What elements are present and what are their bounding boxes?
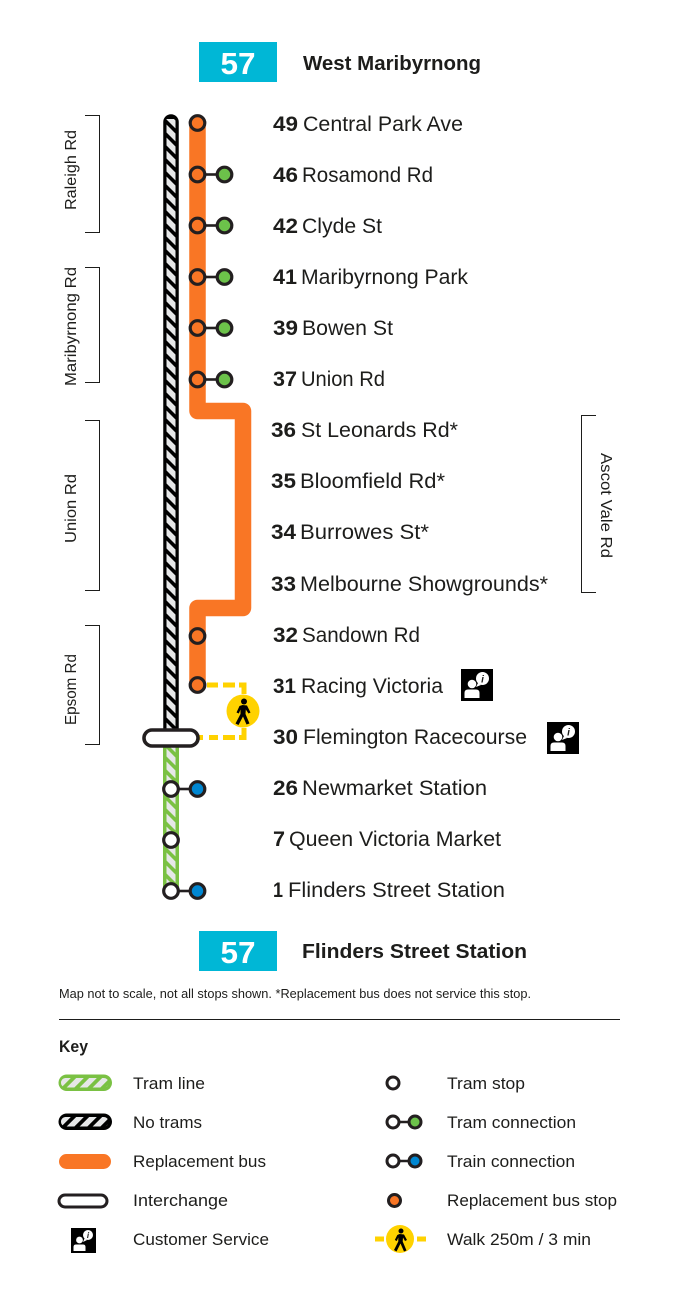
key: replacement bus bbox=[59, 1153, 266, 1171]
stop 32 bbox=[190, 629, 205, 643]
label 26: 26 bbox=[273, 777, 298, 800]
road bracket: Ascot Vale Rd: Ascot Vale Rd bbox=[597, 453, 614, 558]
road bracket: Ascot Vale Rd bbox=[582, 416, 614, 592]
icon: customer service, Racing Victoria: i bbox=[481, 674, 484, 686]
label 36: St Leonards Rd* bbox=[301, 419, 458, 442]
label 1: 1 bbox=[273, 879, 283, 902]
label 30: 30 bbox=[273, 726, 298, 749]
stops: bus stops with tram connections bbox=[164, 116, 232, 898]
key: tram connection bbox=[387, 1114, 576, 1132]
label 34: 34 bbox=[271, 521, 296, 544]
footer header: route 57 Flinders Street Station: Flinders Street Station bbox=[302, 940, 527, 963]
label 37: Union Rd bbox=[301, 368, 385, 391]
label 39: 39 bbox=[273, 317, 298, 340]
label 35: 35 bbox=[271, 470, 296, 493]
key: customer service: Customer Service bbox=[133, 1231, 269, 1249]
label 32: Sandown Rd bbox=[302, 624, 420, 647]
replacement bus route bbox=[198, 122, 243, 685]
interchange bbox=[144, 730, 198, 746]
stop 46 bbox=[190, 167, 232, 182]
label 31: Racing Victoria bbox=[301, 675, 443, 698]
label 33: 33 bbox=[271, 573, 296, 596]
stop 37 bbox=[190, 372, 232, 387]
stop labels bbox=[271, 113, 548, 902]
stop 49 bbox=[190, 116, 205, 130]
label 7: Queen Victoria Market bbox=[289, 828, 501, 851]
road bracket: Maribyrnong Rd bbox=[63, 267, 100, 386]
header: route 57 West Maribyrnong bbox=[199, 42, 481, 82]
stop 26 bbox=[164, 782, 205, 796]
key: tram line bbox=[58, 1074, 205, 1093]
key: tram stop bbox=[387, 1075, 525, 1093]
road bracket: Epsom Rd bbox=[63, 626, 100, 744]
stop 42 bbox=[190, 218, 232, 233]
key: replacement bus stop: Replacement bus stop bbox=[447, 1192, 617, 1210]
label 30: Flemington Racecourse bbox=[303, 726, 527, 749]
label 31: 31 bbox=[273, 675, 296, 698]
footer header: route 57 Flinders Street Station: 57 bbox=[220, 935, 256, 970]
label 42: Clyde St bbox=[302, 215, 382, 238]
footnote: Map not to scale, not all stops shown. *Replacement bus does not service this stop. bbox=[59, 987, 531, 1001]
key: walk: Walk 250m / 3 min bbox=[447, 1231, 591, 1249]
key: no trams: No trams bbox=[133, 1114, 202, 1132]
stop 31 bbox=[190, 678, 205, 692]
stop 7 bbox=[164, 833, 178, 847]
road bracket: Raleigh Rd: Raleigh Rd bbox=[63, 130, 80, 210]
road bracket: Union Rd: Union Rd bbox=[63, 474, 80, 543]
label 34: Burrowes St* bbox=[300, 521, 429, 544]
stop 41 bbox=[190, 270, 232, 284]
stop 39 bbox=[190, 321, 232, 335]
key: interchange bbox=[59, 1192, 228, 1210]
label 49: 49 bbox=[273, 113, 298, 136]
label 41: 41 bbox=[273, 266, 297, 289]
label 7: 7 bbox=[273, 828, 285, 851]
label 46: Rosamond Rd bbox=[302, 164, 433, 187]
header: route 57 West Maribyrnong: 57 bbox=[220, 46, 256, 81]
road bracket: Maribyrnong Rd: Maribyrnong Rd bbox=[63, 267, 80, 386]
key: no trams bbox=[58, 1114, 202, 1132]
label 36: 36 bbox=[271, 419, 296, 442]
label 33: Melbourne Showgrounds* bbox=[300, 573, 548, 596]
key: customer service: i bbox=[87, 1231, 90, 1240]
icon: customer service, Flemington Racecourse: i bbox=[567, 728, 570, 738]
key: tram line: Tram line bbox=[133, 1075, 205, 1093]
key: customer service bbox=[71, 1228, 269, 1253]
key: tram stop: Tram stop bbox=[447, 1075, 525, 1093]
key heading: Key bbox=[59, 1038, 89, 1056]
key: train connection: Train connection bbox=[447, 1153, 575, 1171]
road bracket: Raleigh Rd bbox=[63, 116, 100, 232]
label 35: Bloomfield Rd* bbox=[300, 470, 445, 493]
label 49: Central Park Ave bbox=[303, 113, 463, 136]
walking link bbox=[199, 685, 260, 738]
stop 1 bbox=[164, 884, 205, 898]
key: replacement bus: Replacement bus bbox=[133, 1153, 266, 1171]
label 1: Flinders Street Station bbox=[288, 879, 505, 902]
tram line bbox=[163, 745, 179, 891]
footer header: route 57 Flinders Street Station bbox=[199, 931, 527, 971]
label 41: Maribyrnong Park bbox=[301, 266, 469, 289]
label 39: Bowen St bbox=[302, 317, 393, 340]
label 46: 46 bbox=[273, 164, 298, 187]
road bracket: Epsom Rd: Epsom Rd bbox=[63, 654, 80, 725]
icon: customer service, Racing Victoria bbox=[461, 669, 493, 701]
header: route 57 West Maribyrnong: West Maribyrnong bbox=[303, 52, 481, 75]
label 26: Newmarket Station bbox=[302, 777, 487, 800]
label 32: 32 bbox=[273, 624, 298, 647]
label 37: 37 bbox=[273, 368, 297, 391]
key: walk bbox=[375, 1225, 591, 1253]
key: interchange: Interchange bbox=[133, 1192, 228, 1210]
key: tram connection: Tram connection bbox=[447, 1114, 576, 1132]
icon: customer service, Flemington Racecourse bbox=[547, 722, 579, 754]
no trams line bbox=[166, 119, 176, 737]
label 42: 42 bbox=[273, 215, 298, 238]
road bracket: Union Rd bbox=[63, 420, 100, 590]
key: train connection bbox=[387, 1153, 575, 1171]
